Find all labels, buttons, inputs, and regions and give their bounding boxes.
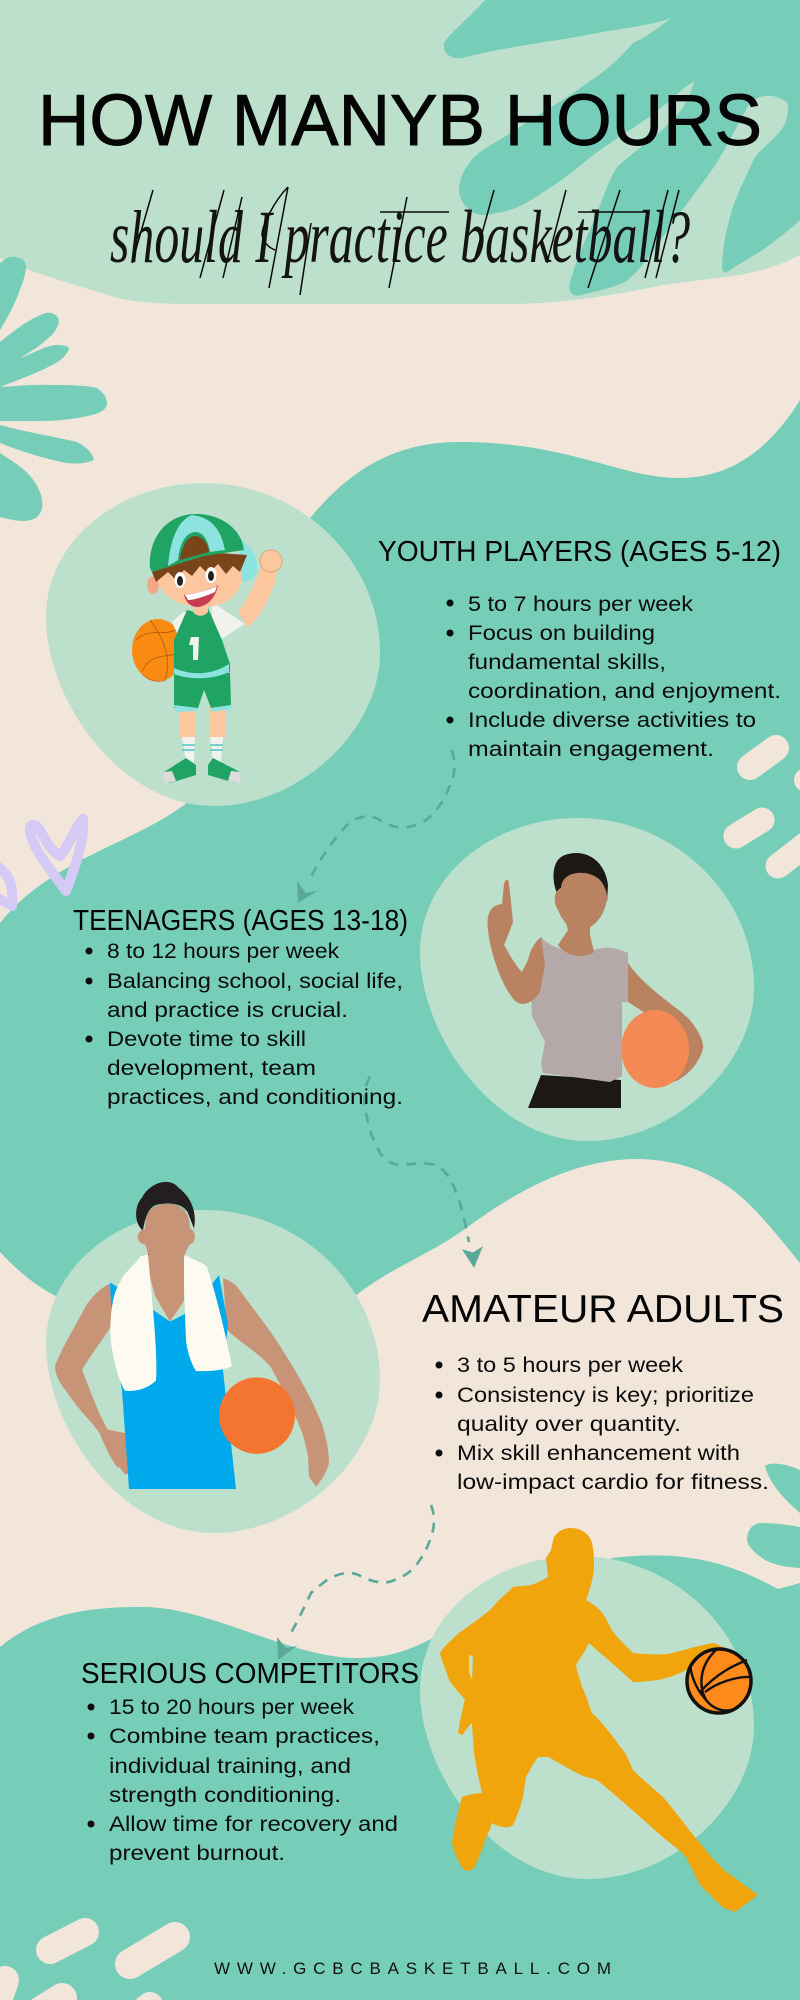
circle: adult: [46, 1210, 380, 1533]
cream pills right: [736, 748, 800, 866]
right lower leaves: [747, 1464, 800, 1568]
bullets: youth: Focus on building: [468, 622, 655, 645]
heading: teenagers: TEENAGERS (AGES 13-18): [73, 905, 408, 937]
bullets: amateur adults: Consistency is key; prioritize: [457, 1384, 754, 1407]
footer website: WWW.GCBCBASKETBALL.COM: [214, 1959, 611, 1978]
bullets: teenagers: [86, 940, 403, 1109]
bullets: amateur adults: Mix skill enhancement with: [457, 1442, 740, 1465]
illustration: boy with basketball: [132, 514, 282, 783]
subtitle: [110, 187, 690, 295]
left leaf cluster: [0, 257, 107, 521]
hearts: [0, 819, 83, 906]
bullets: youth: Include diverse activities to: [468, 709, 756, 732]
bullets: teenagers: 8 to 12 hours per week: [107, 940, 340, 963]
illustration: gold player silhouette dribbling: [440, 1528, 758, 1912]
circle: teen: [420, 818, 754, 1141]
bottom teal wave: [0, 1555, 800, 2000]
section: amateur adults: [422, 1288, 784, 1494]
illustration: teen with thumb up: [488, 853, 703, 1108]
title: HOW MANYB HOURS: [38, 81, 762, 161]
bullets: teenagers: development, team: [107, 1057, 316, 1080]
bullets: serious competitors: [88, 1696, 398, 1865]
illustration: adult with towel and ball: [55, 1182, 329, 1489]
bullets: serious competitors: prevent burnout.: [109, 1842, 285, 1865]
bullets: amateur adults: [436, 1354, 769, 1494]
bullets: teenagers: Balancing school, social life,: [107, 970, 403, 993]
circle: youth: [46, 483, 380, 806]
bullets: serious competitors: individual training, and: [109, 1755, 351, 1778]
main teal wave: [0, 400, 800, 1296]
bullets: teenagers: Devote time to skill: [107, 1028, 306, 1051]
bullets: amateur adults: low-impact cardio for fitness.: [457, 1471, 769, 1494]
section: youth players: [378, 536, 781, 761]
bullets: serious competitors: strength conditioning.: [109, 1784, 341, 1807]
bullets: youth: [446, 593, 781, 761]
bullets: teenagers: and practice is crucial.: [107, 999, 348, 1022]
header blob: [0, 0, 800, 304]
bullets: youth: coordination, and enjoyment.: [468, 680, 781, 703]
header leaves: [444, 0, 800, 296]
cream pills bottom: [0, 1932, 175, 2000]
circle: competitor: [420, 1556, 754, 1879]
subtitle: should I practice basketball?: [110, 196, 690, 279]
bullets: serious competitors: Combine team practices,: [109, 1725, 380, 1748]
bullets: teenagers: practices, and conditioning.: [107, 1086, 403, 1109]
heading: youth: YOUTH PLAYERS (AGES 5-12): [378, 536, 781, 568]
arrow 2: teen to adult: [364, 1077, 483, 1268]
bullets: youth: maintain engagement.: [468, 738, 714, 761]
bullets: amateur adults: 3 to 5 hours per week: [457, 1354, 684, 1377]
arrow 3: adult to competitor: [277, 1505, 434, 1660]
arrow 1: youth to teen: [297, 750, 454, 903]
section: teenagers: [73, 905, 408, 1109]
bullets: serious competitors: 15 to 20 hours per week: [109, 1696, 355, 1719]
bullets: youth: fundamental skills,: [468, 651, 666, 674]
bullets: serious competitors: Allow time for recovery and: [109, 1813, 398, 1836]
bullets: youth: 5 to 7 hours per week: [468, 593, 694, 616]
bullets: amateur adults: quality over quantity.: [457, 1413, 681, 1436]
section: serious competitors: [81, 1658, 419, 1865]
heading: serious competitors: SERIOUS COMPETITORS: [81, 1658, 419, 1690]
heading: amateur adults: AMATEUR ADULTS: [422, 1288, 784, 1331]
